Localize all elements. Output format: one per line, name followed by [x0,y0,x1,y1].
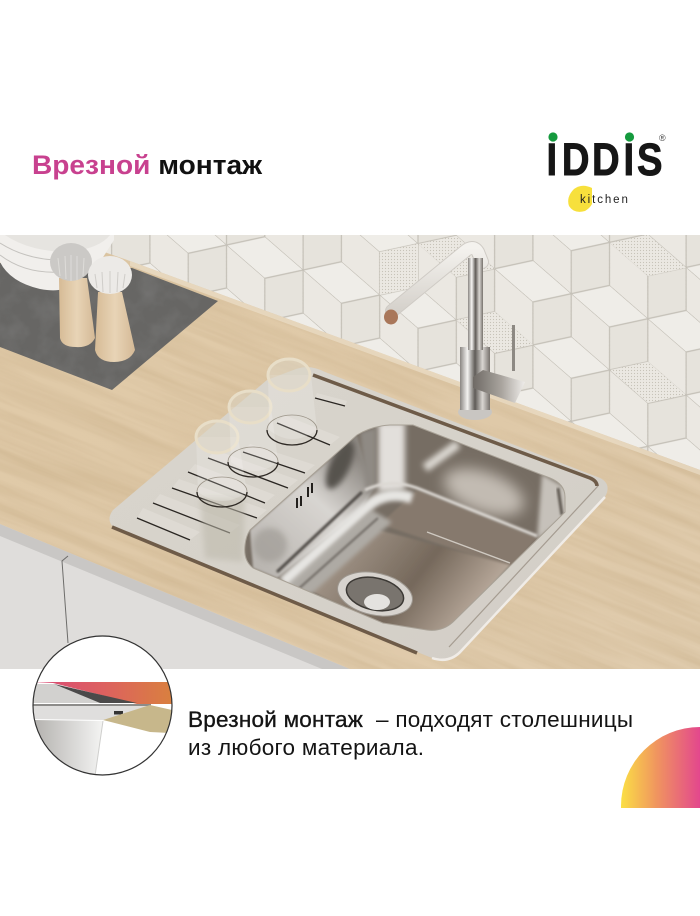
description line one: Врезной монтаж – подходят столешницы [188,707,633,732]
description line two: из любого материала. [188,735,424,760]
description text [188,707,633,760]
product photo [0,235,700,669]
drain strainer [337,572,413,617]
faucet riser [468,258,483,350]
right shaker [88,256,135,362]
inset: cross-section of flush mount [33,636,172,776]
lower left wall [285,510,392,595]
tiled wall [106,235,700,470]
logo green dots [548,132,634,142]
spout copper end [384,310,398,324]
clip [114,711,123,714]
slate mat [0,260,220,392]
registered mark: ® [659,133,666,143]
orange countertop surface [33,682,172,704]
glass one [196,421,247,507]
glass three [267,359,317,445]
drainer ribs [137,393,347,540]
chipboard cutaway [103,705,172,733]
sink edge dark slope [54,684,137,703]
bowl back wall highlights [378,422,405,492]
glass two [228,391,278,477]
bowl floor [313,531,510,630]
sink bowl [245,426,564,630]
logo: IDDIS kitchen [547,132,666,212]
salt and pepper shakers [50,243,135,362]
logo wordmark: IDDIS [547,134,663,185]
faucet lower body [460,347,490,410]
faucet handle [473,370,525,403]
faucet [384,248,525,420]
bowl ridge [277,492,362,572]
bowl left wall [250,435,373,578]
overflow slots [297,483,312,508]
wood countertop [0,252,700,669]
glass reflection on sink [200,498,245,562]
sink rim [109,367,608,660]
drinking glasses [196,359,317,507]
stainless sink [109,359,608,660]
sink edge silver [33,684,100,703]
kitchen label: kitchen [580,194,630,206]
decorative gradient circle [621,727,700,885]
title: Врезной монтаж [32,150,263,180]
lower sink wall [33,720,103,776]
bowl lower band [388,491,534,566]
left shaker [50,243,95,347]
yellow blob [568,186,592,212]
white bowls [0,235,114,290]
faucet spout [392,248,482,311]
faucet base [458,408,492,420]
faucet lever [512,325,515,371]
under-counter cabinets [0,520,360,670]
sink lip [33,704,151,706]
